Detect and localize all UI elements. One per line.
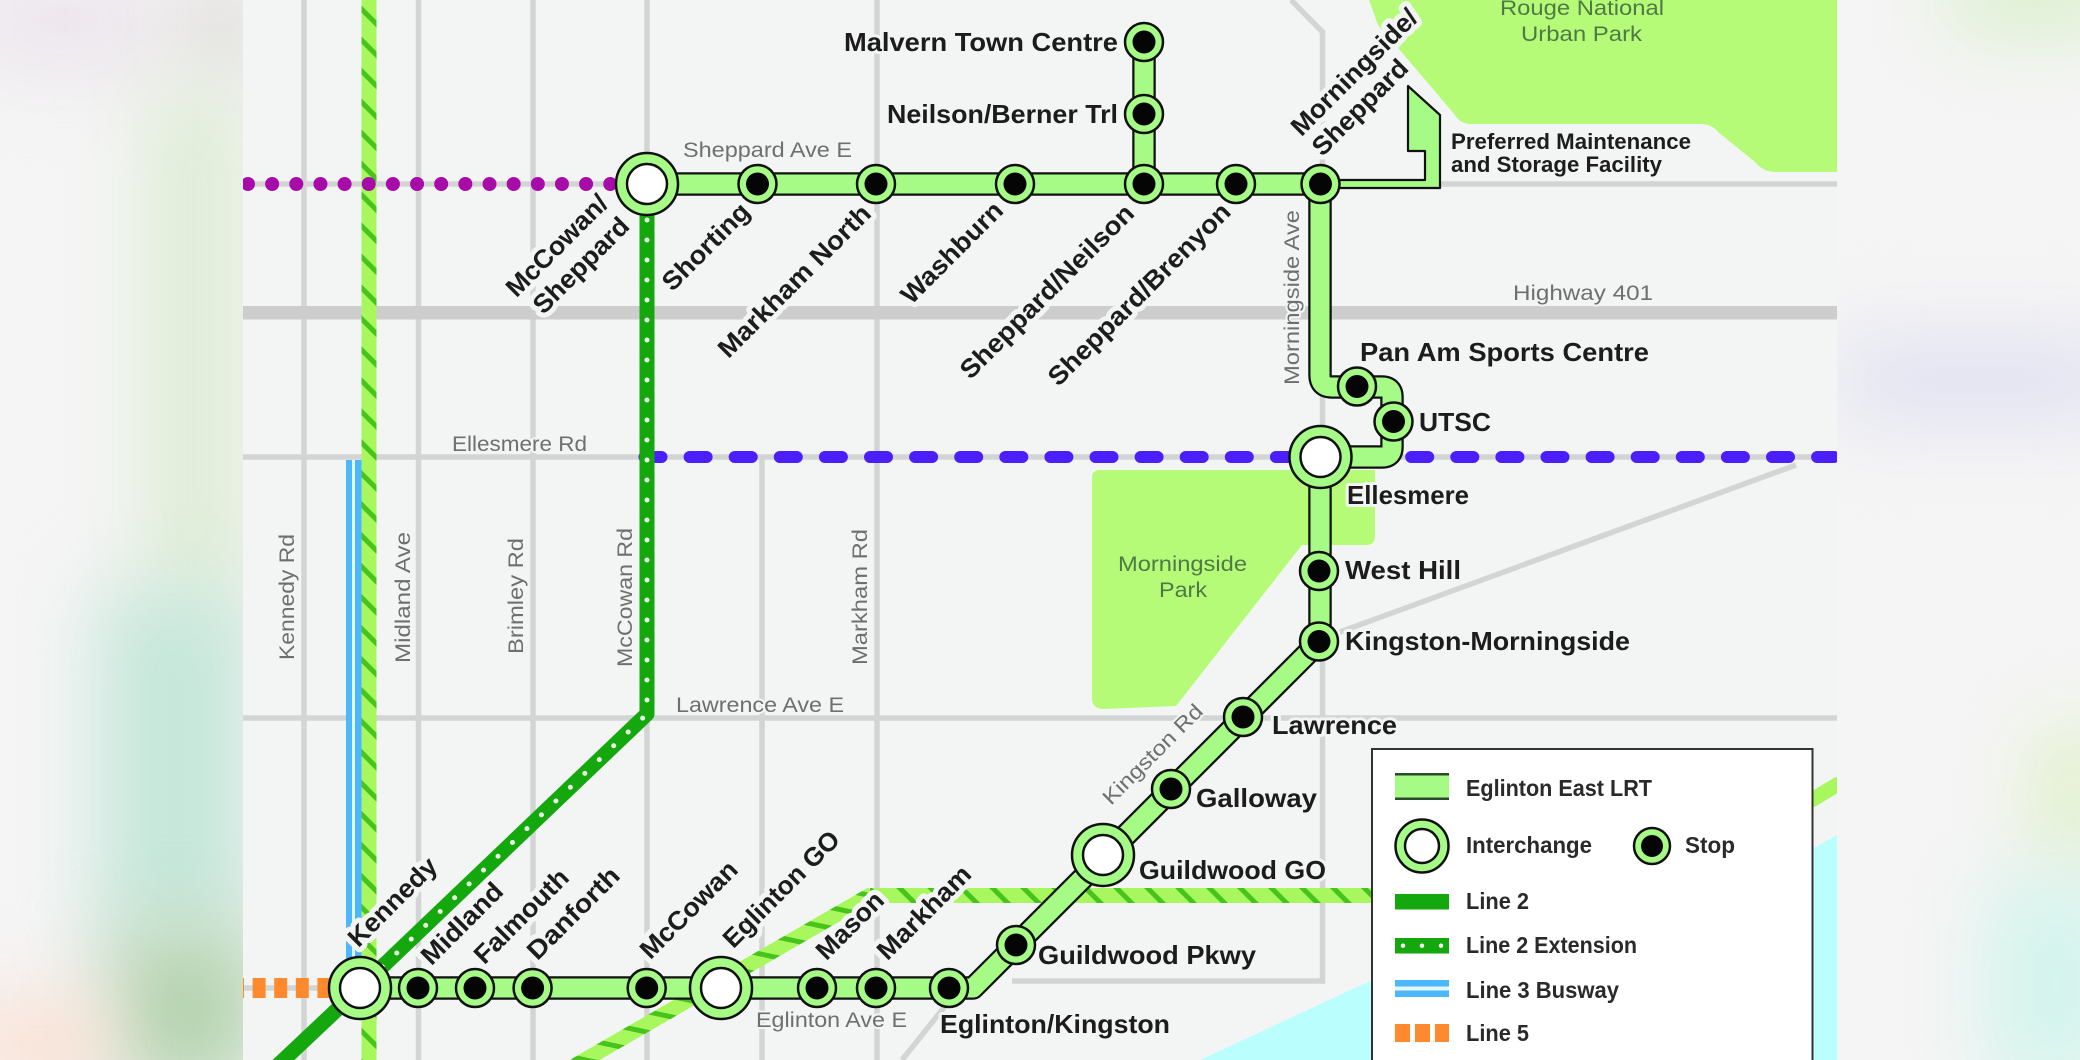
stop: Mason <box>798 969 836 1007</box>
stop: Guildwood Pkwy <box>997 926 1035 964</box>
label: Sheppard Ave E: Sheppard Ave E <box>683 139 852 162</box>
station label: Falmouth: Falmouth <box>467 862 575 970</box>
label: Kingston Rd: Kingston Rd <box>1098 700 1208 809</box>
stop: Eglinton/Kingston <box>930 969 968 1007</box>
Eglinton East LRT route <box>360 42 1440 988</box>
stop: Galloway <box>1152 770 1190 808</box>
facility label: Preferred Maintenance <box>1451 129 1691 154</box>
station label: McCowan: McCowan <box>633 854 744 965</box>
stop: McCowan <box>628 969 666 1007</box>
road labels <box>276 139 1653 1032</box>
GO rail: Lakeshore East diagonal <box>550 894 872 1060</box>
station label: Markham North: Markham North <box>711 198 877 364</box>
label: Highway 401: Highway 401 <box>1513 282 1653 305</box>
station label: Washburn: Washburn <box>894 195 1009 310</box>
road network <box>243 0 1837 1060</box>
station label: Markham: Markham <box>870 859 977 966</box>
stop: Kingston-Morningside <box>1300 622 1338 660</box>
stop: Lawrence <box>1224 698 1262 736</box>
station label: West Hill: West Hill <box>1345 555 1461 585</box>
station label: Shorting: Shorting <box>655 196 756 297</box>
Sheppard dotted line <box>248 177 620 191</box>
stop: Sheppard/Brenyon <box>1217 165 1255 203</box>
station label: Sheppard/Brenyon: Sheppard/Brenyon <box>1041 196 1237 392</box>
stop: Malvern Town Centre <box>1125 23 1163 61</box>
label: Morningside Ave: Morningside Ave <box>1281 210 1304 385</box>
legend: Eglinton East LRT <box>1395 773 1652 801</box>
station label: Neilson/Berner Trl: Neilson/Berner Trl <box>887 99 1118 129</box>
legend: Eglinton East LRT: Eglinton East LRT <box>1466 775 1652 801</box>
stop: Midland <box>399 969 437 1007</box>
legend: Line 3 Busway <box>1395 977 1619 1003</box>
stop: Falmouth <box>456 969 494 1007</box>
label: Kennedy Rd: Kennedy Rd <box>276 534 299 660</box>
label: Markham Rd: Markham Rd <box>849 529 872 665</box>
station label: UTSC: UTSC <box>1419 407 1491 437</box>
stop: Danforth <box>514 969 552 1007</box>
horizontal station labels <box>844 27 1649 1039</box>
stop: UTSC <box>1374 402 1412 440</box>
GO rail: Lakeshore East horizontal <box>870 888 1380 903</box>
station label: Sheppard/Neilson: Sheppard/Neilson <box>953 198 1140 385</box>
GO rail: Lakeshore East far right <box>1814 776 1837 808</box>
legend: Interchange <box>1396 820 1592 872</box>
legend: Line 3 Busway: Line 3 Busway <box>1466 977 1619 1003</box>
legend: Interchange: Interchange <box>1466 832 1592 858</box>
station label: Eglinton GO: Eglinton GO <box>716 824 846 954</box>
stop: Shorting <box>738 165 776 203</box>
legend: Line 5: Line 5 <box>1466 1020 1529 1046</box>
Line 5 <box>240 978 335 998</box>
label: Morningside: Morningside <box>1118 553 1247 576</box>
interchange: Kennedy <box>329 957 391 1019</box>
interchange: Ellesmere <box>1290 426 1352 488</box>
station label: Guildwood GO: Guildwood GO <box>1139 855 1326 885</box>
stop: Neilson/Berner Trl <box>1125 95 1163 133</box>
legend: Line 2 Extension: Line 2 Extension <box>1466 932 1637 958</box>
interchange: Eglinton GO <box>690 957 752 1019</box>
label: McCowan Rd: McCowan Rd <box>614 528 637 667</box>
Ellesmere dashed line <box>644 451 1850 463</box>
station label: Sheppard: Sheppard <box>526 211 635 320</box>
legend: Line 2: Line 2 <box>1466 888 1529 914</box>
station label: Kingston-Morningside: Kingston-Morningside <box>1345 626 1630 656</box>
legend <box>1372 749 1812 1060</box>
station label: Sheppard (Morningside): Sheppard <box>1305 53 1414 162</box>
station label: Eglinton/Kingston: Eglinton/Kingston <box>940 1009 1170 1039</box>
stop: Pan Am Sports Centre <box>1338 368 1376 406</box>
stop: West Hill <box>1300 552 1338 590</box>
map panel <box>240 0 1850 1060</box>
station label: Guildwood Pkwy: Guildwood Pkwy <box>1038 940 1257 970</box>
legend: Stop <box>1634 828 1735 864</box>
Line 2 Extension <box>362 200 647 986</box>
legend: Line 2 Extension <box>1395 932 1637 958</box>
stop: Markham North <box>857 165 895 203</box>
station label: Midland: Midland <box>414 876 509 971</box>
station label: Ellesmere: Ellesmere <box>1347 480 1469 510</box>
interchange: Guildwood GO <box>1072 824 1134 886</box>
station label: Morningside/: Morningside/ <box>1284 2 1424 142</box>
Line 2 solid south of Kennedy <box>272 1004 342 1060</box>
station label: Pan Am Sports Centre: Pan Am Sports Centre <box>1360 337 1649 367</box>
station label: Danforth: Danforth <box>520 860 626 966</box>
label: Lawrence Ave E: Lawrence Ave E <box>676 694 844 717</box>
stop: Washburn <box>996 165 1034 203</box>
Line 3 Busway <box>346 460 362 980</box>
park labels <box>1118 0 1664 602</box>
stop: Markham <box>857 969 895 1007</box>
station label: Kennedy: Kennedy <box>341 850 444 953</box>
label: Brimley Rd: Brimley Rd <box>505 538 528 654</box>
label: Ellesmere Rd: Ellesmere Rd <box>452 433 587 456</box>
legend: Stop: Stop <box>1685 832 1735 858</box>
legend: Line 5 <box>1395 1020 1529 1046</box>
stop: Sheppard/Neilson <box>1125 165 1163 203</box>
maintenance spur <box>1338 86 1440 188</box>
park: Morningside Park <box>1092 470 1375 709</box>
water: lake <box>1200 835 1837 1060</box>
GO rail: Stouffville corridor <box>362 0 376 1060</box>
label: Urban Park: Urban Park <box>1521 23 1643 46</box>
road: Highway 401 <box>243 306 1837 320</box>
interchange: McCowan/Sheppard <box>616 153 678 215</box>
station label: Galloway: Galloway <box>1196 783 1318 813</box>
legend: Line 2 <box>1395 888 1529 914</box>
angled station labels <box>341 2 1424 971</box>
station label: Lawrence: Lawrence <box>1272 710 1397 740</box>
facility label: and Storage Facility <box>1451 152 1663 177</box>
label: Park: Park <box>1159 579 1208 602</box>
label: Eglinton Ave E: Eglinton Ave E <box>756 1009 907 1032</box>
station label: Malvern Town Centre: Malvern Town Centre <box>844 27 1118 57</box>
facility label <box>1451 129 1691 177</box>
station label: McCowan/: McCowan/ <box>499 188 614 303</box>
station label: Mason: Mason <box>809 885 890 966</box>
park: Rouge National Urban Park <box>1369 0 1837 172</box>
label: Midland Ave: Midland Ave <box>392 532 415 663</box>
stop: Morningside/Sheppard <box>1302 165 1340 203</box>
